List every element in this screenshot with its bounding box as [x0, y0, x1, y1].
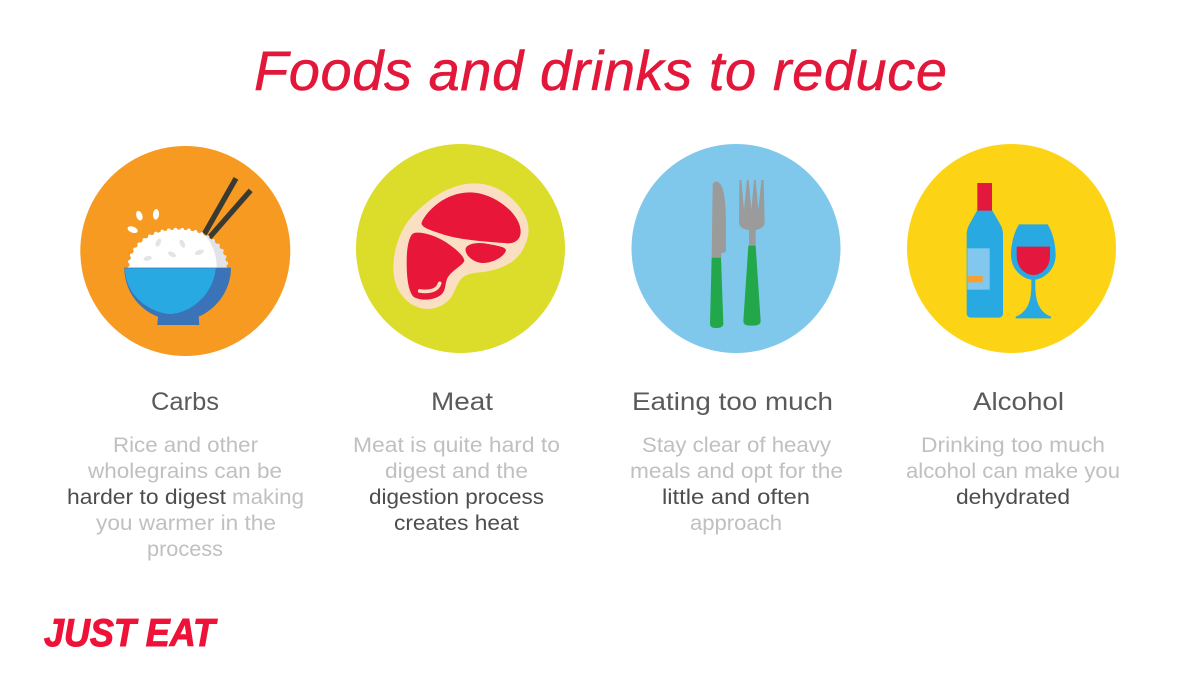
icon: steak — [393, 183, 529, 309]
title: Foods and drinks to reduce — [254, 39, 947, 102]
text block: carbs — [67, 434, 304, 561]
icon: rice bowl — [124, 178, 251, 325]
text block: eating too much: approach — [690, 512, 782, 535]
text block: alcohol — [906, 434, 1120, 509]
panel: alcohol — [906, 144, 1120, 509]
text block: carbs: you warmer in the — [96, 512, 276, 535]
text block: meat: Meat is quite hard to — [353, 434, 560, 457]
icon circle: carbs — [80, 146, 290, 356]
text block: carbs: wholegrains can be — [87, 460, 282, 483]
icon: wine bottle and glass — [967, 183, 1056, 318]
panel: eating too much — [630, 144, 843, 535]
heading: meat: Meat — [431, 388, 493, 416]
text block: eating too much: Stay clear of heavy — [642, 434, 832, 457]
icon circle: eating too much — [632, 144, 840, 353]
text block: eating too much: little and often — [662, 486, 810, 509]
text block: meat: digest and the — [385, 460, 528, 483]
text block: meat: digestion process — [369, 486, 544, 509]
text block: meat: creates heat — [394, 512, 519, 535]
text block: alcohol: Drinking too much — [921, 434, 1105, 457]
heading: carbs: Carbs — [151, 388, 219, 416]
heading: alcohol: Alcohol — [973, 388, 1064, 416]
text block: alcohol: dehydrated — [956, 486, 1070, 509]
icon circle: meat — [356, 144, 565, 353]
text block: carbs: Rice and other — [113, 434, 258, 457]
icon: knife and fork — [710, 180, 765, 328]
text block: alcohol: alcohol can make you — [906, 460, 1120, 483]
infographic: foods and drinks to reduce — [44, 49, 1119, 647]
text block: eating too much — [630, 434, 843, 535]
panel: carbs — [67, 146, 304, 561]
text block: carbs: process — [147, 538, 223, 561]
panel: meat — [353, 144, 565, 535]
text block: eating too much: meals and opt for the — [630, 460, 843, 483]
text block: carbs: making — [232, 486, 304, 509]
text block: carbs: harder to digest — [67, 486, 226, 509]
text block: meat — [353, 434, 560, 535]
logo: Just Eat: JUST EAT — [44, 612, 218, 655]
icon circle: alcohol — [907, 144, 1116, 353]
heading: eating too much: Eating too much — [632, 388, 833, 416]
